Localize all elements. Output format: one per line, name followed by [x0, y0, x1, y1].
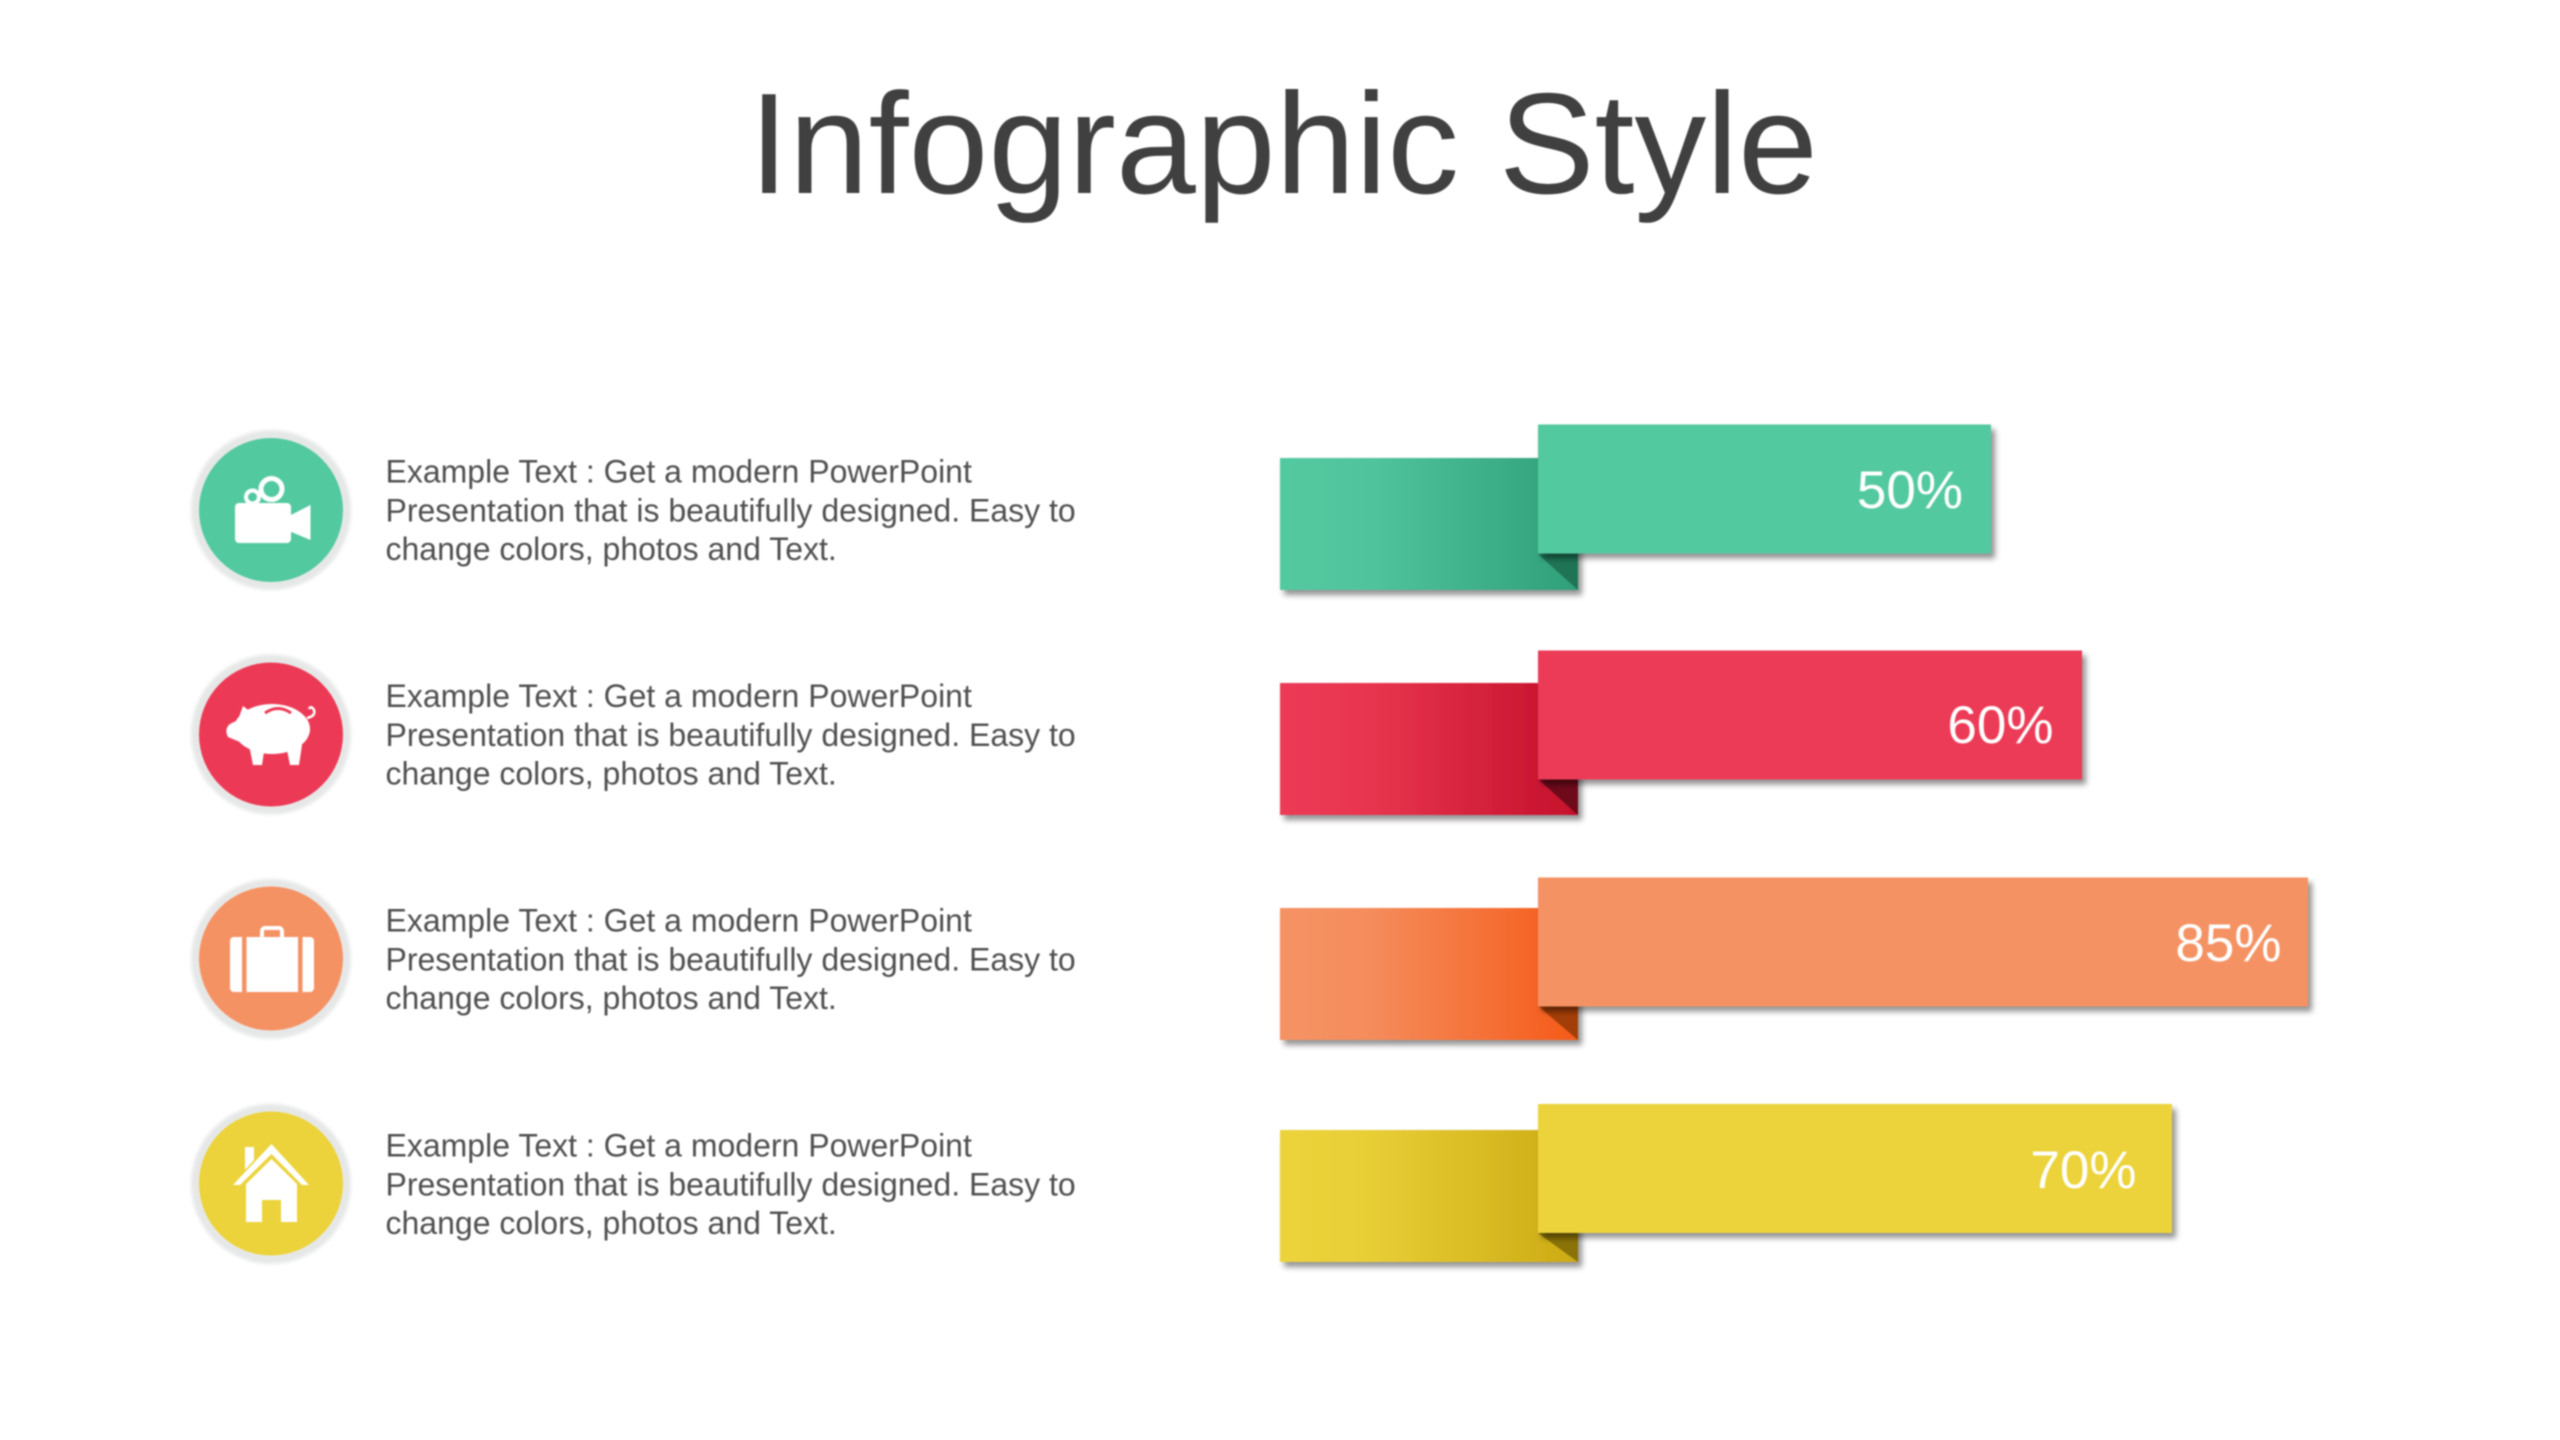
value label: 70% [2030, 1141, 2136, 1200]
description text: change colors, photos and Text. [386, 756, 837, 792]
description text: change colors, photos and Text. [386, 531, 837, 567]
description text: Example Text : Get a modern PowerPoint [386, 1128, 972, 1164]
value label: 50% [1857, 461, 1963, 520]
ribbon bar 60% [1280, 650, 2082, 815]
description text: Presentation that is beautifully designed. Easy to [386, 717, 1076, 753]
icon: briefcase [191, 879, 351, 1039]
description text: Example Text : Get a modern PowerPoint [386, 902, 972, 938]
icon: house [191, 1104, 351, 1264]
description text: Presentation that is beautifully designed. Easy to [386, 1166, 1076, 1202]
value label: 85% [2175, 914, 2282, 973]
description text: Example Text : Get a modern PowerPoint [386, 454, 972, 490]
description text: Presentation that is beautifully designed. Easy to [386, 942, 1076, 978]
value label: 60% [1947, 696, 2054, 755]
icon: video camera [191, 430, 351, 590]
row 2: piggy bank [191, 654, 1076, 814]
ribbon bar 85% [1280, 878, 2308, 1040]
ribbon bar 70% [1280, 1104, 2172, 1262]
description text: change colors, photos and Text. [386, 1205, 837, 1241]
description text: Example Text : Get a modern PowerPoint [386, 678, 972, 714]
row 3: briefcase [191, 879, 1076, 1039]
description text: Presentation that is beautifully designed. Easy to [386, 492, 1076, 528]
ribbon bar 50% [1280, 424, 1991, 590]
row 1: video camera [191, 430, 1076, 590]
icon: piggy bank [191, 654, 351, 814]
title: Infographic Style [749, 64, 1818, 224]
row 4: house [191, 1104, 1076, 1264]
description text: change colors, photos and Text. [386, 980, 837, 1016]
